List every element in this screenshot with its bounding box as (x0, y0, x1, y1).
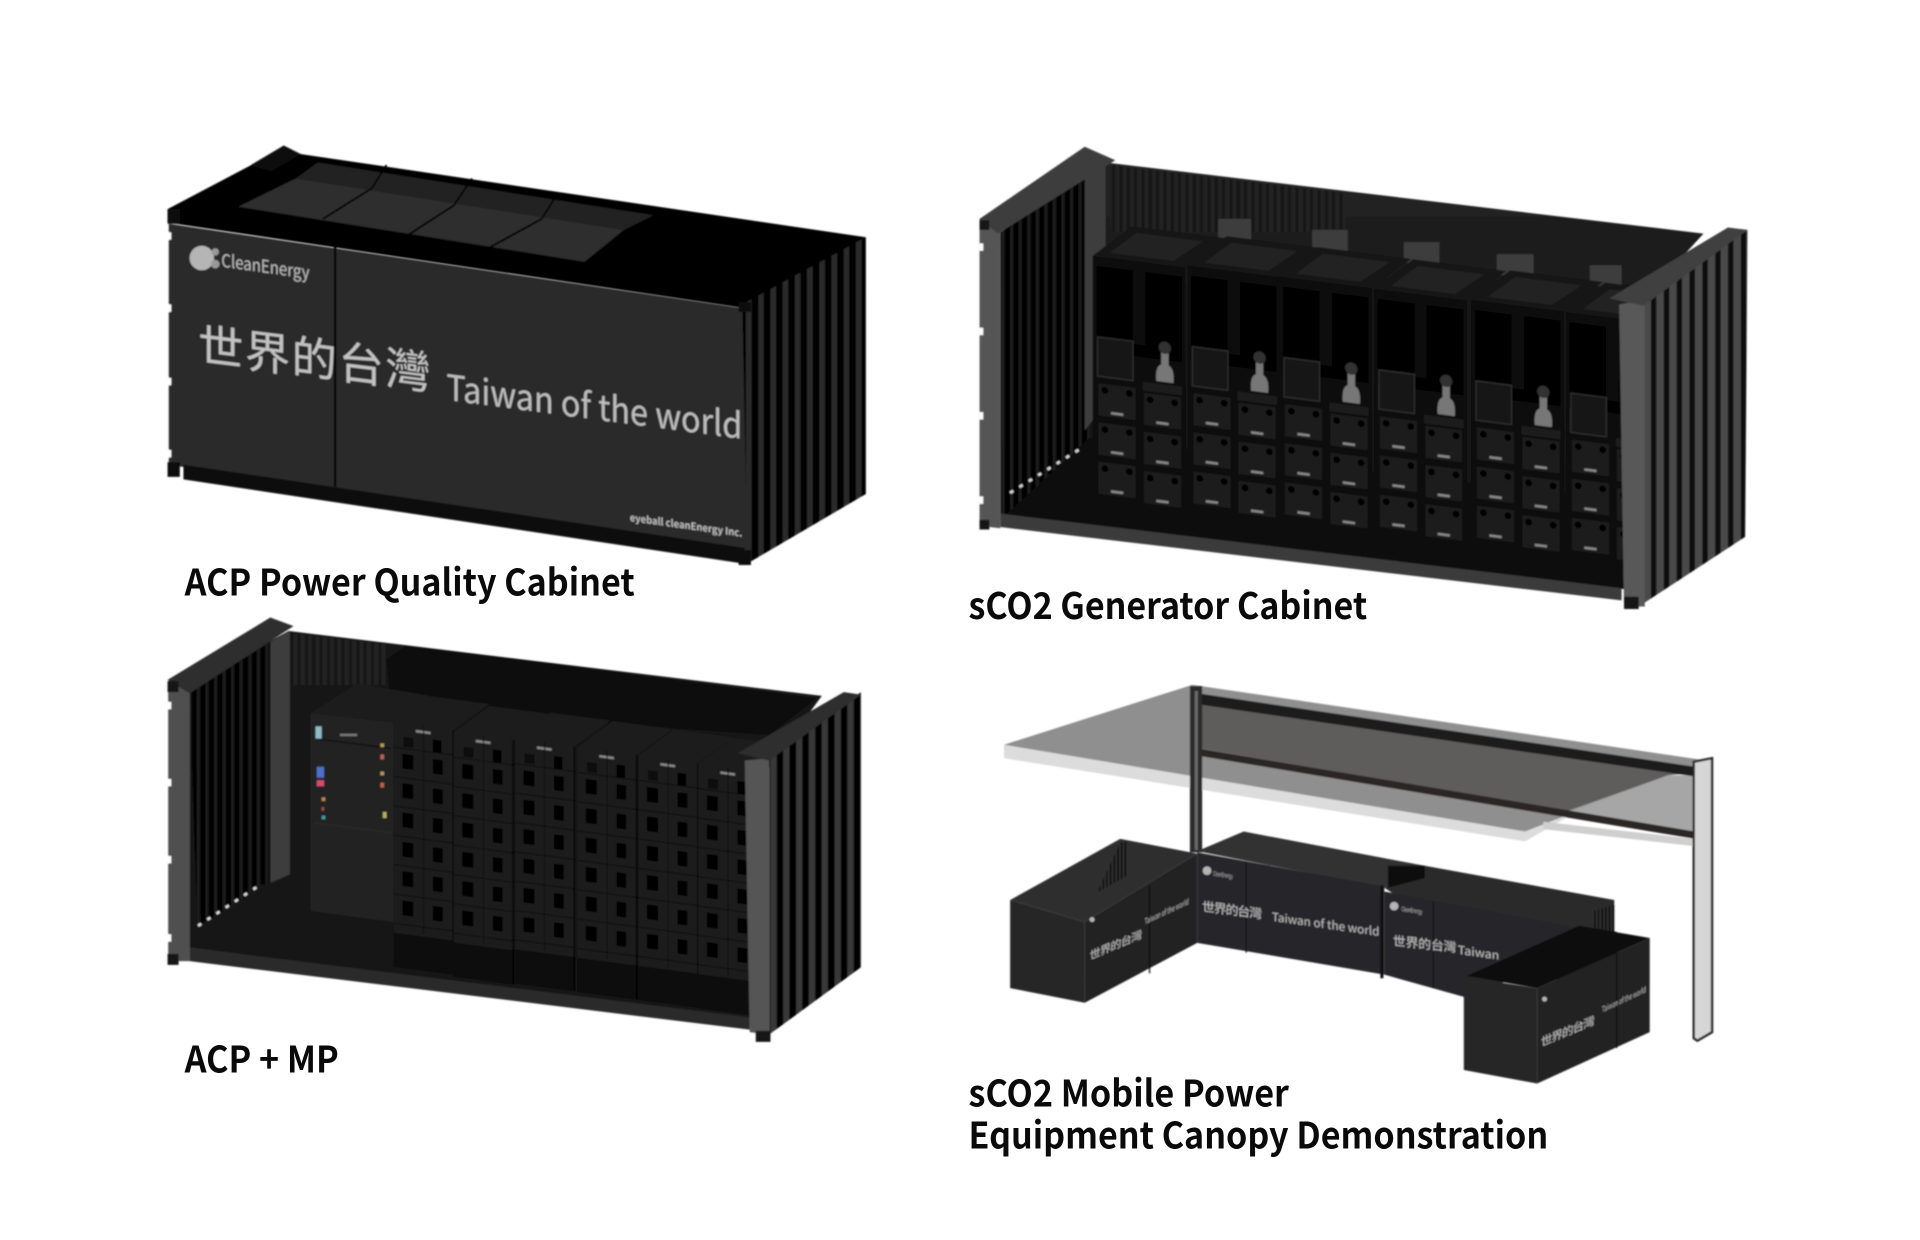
roof panels (239, 163, 653, 262)
logo (190, 246, 310, 285)
left post (1190, 686, 1202, 852)
label: sCO2 Mobile Power canopy two-line (969, 1064, 1548, 1159)
right unit (1464, 926, 1650, 1083)
dark upper recess (386, 646, 817, 735)
corner castings (168, 146, 751, 565)
light leak dots (198, 885, 259, 926)
right unit: 世界的台灣 (1541, 1012, 1595, 1050)
rear unit: 世界的台灣 (1393, 933, 1457, 955)
light leak dots (1010, 448, 1082, 493)
left unit: 世界的台灣 (1090, 927, 1142, 963)
canopy plate edge (1004, 745, 1568, 841)
door seam (334, 245, 336, 487)
floor (1000, 438, 1626, 589)
translucent right section (1568, 775, 1695, 836)
label: ACP Power Quality Cabinet: ACP Power Quality Cabinet (184, 553, 635, 607)
floor sill (1000, 514, 1622, 600)
label: sCO2 Mobile Power canopy two-line: Equipment Canopy Demonstration (969, 1105, 1548, 1159)
container roof (168, 148, 866, 308)
ACP cabinet (311, 684, 429, 922)
right corrugated end (769, 692, 861, 1035)
inner rear post (270, 631, 290, 883)
edge notches (980, 243, 983, 504)
label: sCO2 Generator Cabinet: sCO2 Generator Cabinet (969, 576, 1367, 630)
corner castings (168, 681, 770, 1042)
left roof rail (168, 618, 294, 693)
middle unit: Taiwan of the world (1272, 908, 1379, 940)
inner rear post (1085, 165, 1106, 430)
middle unit: 世界的台灣 (1202, 899, 1262, 921)
back wall (1000, 163, 1704, 587)
edge notches (168, 702, 171, 942)
floor sill (190, 948, 750, 1030)
canopy shade between beams (1201, 702, 1694, 811)
edge notches (168, 232, 171, 457)
middle unit: CleanEnergy (1213, 869, 1233, 880)
wall tiles (1218, 219, 1622, 286)
maker text: eyeball cleanEnergy Inc. (630, 509, 742, 540)
right corrugated end (1639, 230, 1748, 607)
floor (190, 884, 750, 1017)
panel: ACP + MP container (168, 618, 861, 1042)
bottom sill (183, 465, 745, 564)
upper beam (1198, 693, 1695, 777)
left front post (980, 219, 1000, 528)
lower beam (1198, 748, 1695, 839)
left corrugated wall (190, 642, 270, 927)
slogan English: Taiwan of the world (446, 360, 742, 450)
panel: ACP Power Quality Cabinet container (168, 146, 866, 565)
panel: sCO2 Generator Cabinet container (980, 147, 1748, 609)
left front post (168, 682, 190, 961)
right unit: Taiwan of the world (1602, 983, 1646, 1015)
right corrugated end (740, 237, 866, 565)
back wall (190, 631, 822, 1021)
generator cabinets (1093, 221, 1698, 598)
label: ACP + MP: ACP + MP (184, 1029, 339, 1083)
corner castings (980, 220, 1639, 609)
rear unit: Taiwan (1458, 941, 1499, 964)
front face (169, 224, 747, 553)
right post (1694, 758, 1712, 1041)
slogan Chinese: 世界的台灣 (198, 320, 430, 399)
middle unit (1197, 832, 1425, 975)
label: sCO2 Mobile Power canopy two-line: sCO2 Mobile Power (969, 1064, 1290, 1118)
left unit (1010, 839, 1197, 1003)
left unit: Taiwan of the world (1145, 895, 1189, 927)
rear unit: CleanEnergy (1401, 904, 1423, 916)
panel: sCO2 mobile power canopy (1004, 685, 1712, 1083)
right front post (745, 758, 769, 1035)
canopy plate top (1004, 685, 1707, 832)
left roof rail (980, 147, 1115, 234)
left corrugated wall (1000, 171, 1091, 520)
rear unit (1382, 866, 1614, 998)
logo: CleanEnergy (221, 247, 310, 285)
MP battery cabinets (394, 692, 794, 1021)
right roof rail (737, 692, 861, 761)
right roof rail (1609, 227, 1748, 306)
right front post (1619, 300, 1645, 607)
